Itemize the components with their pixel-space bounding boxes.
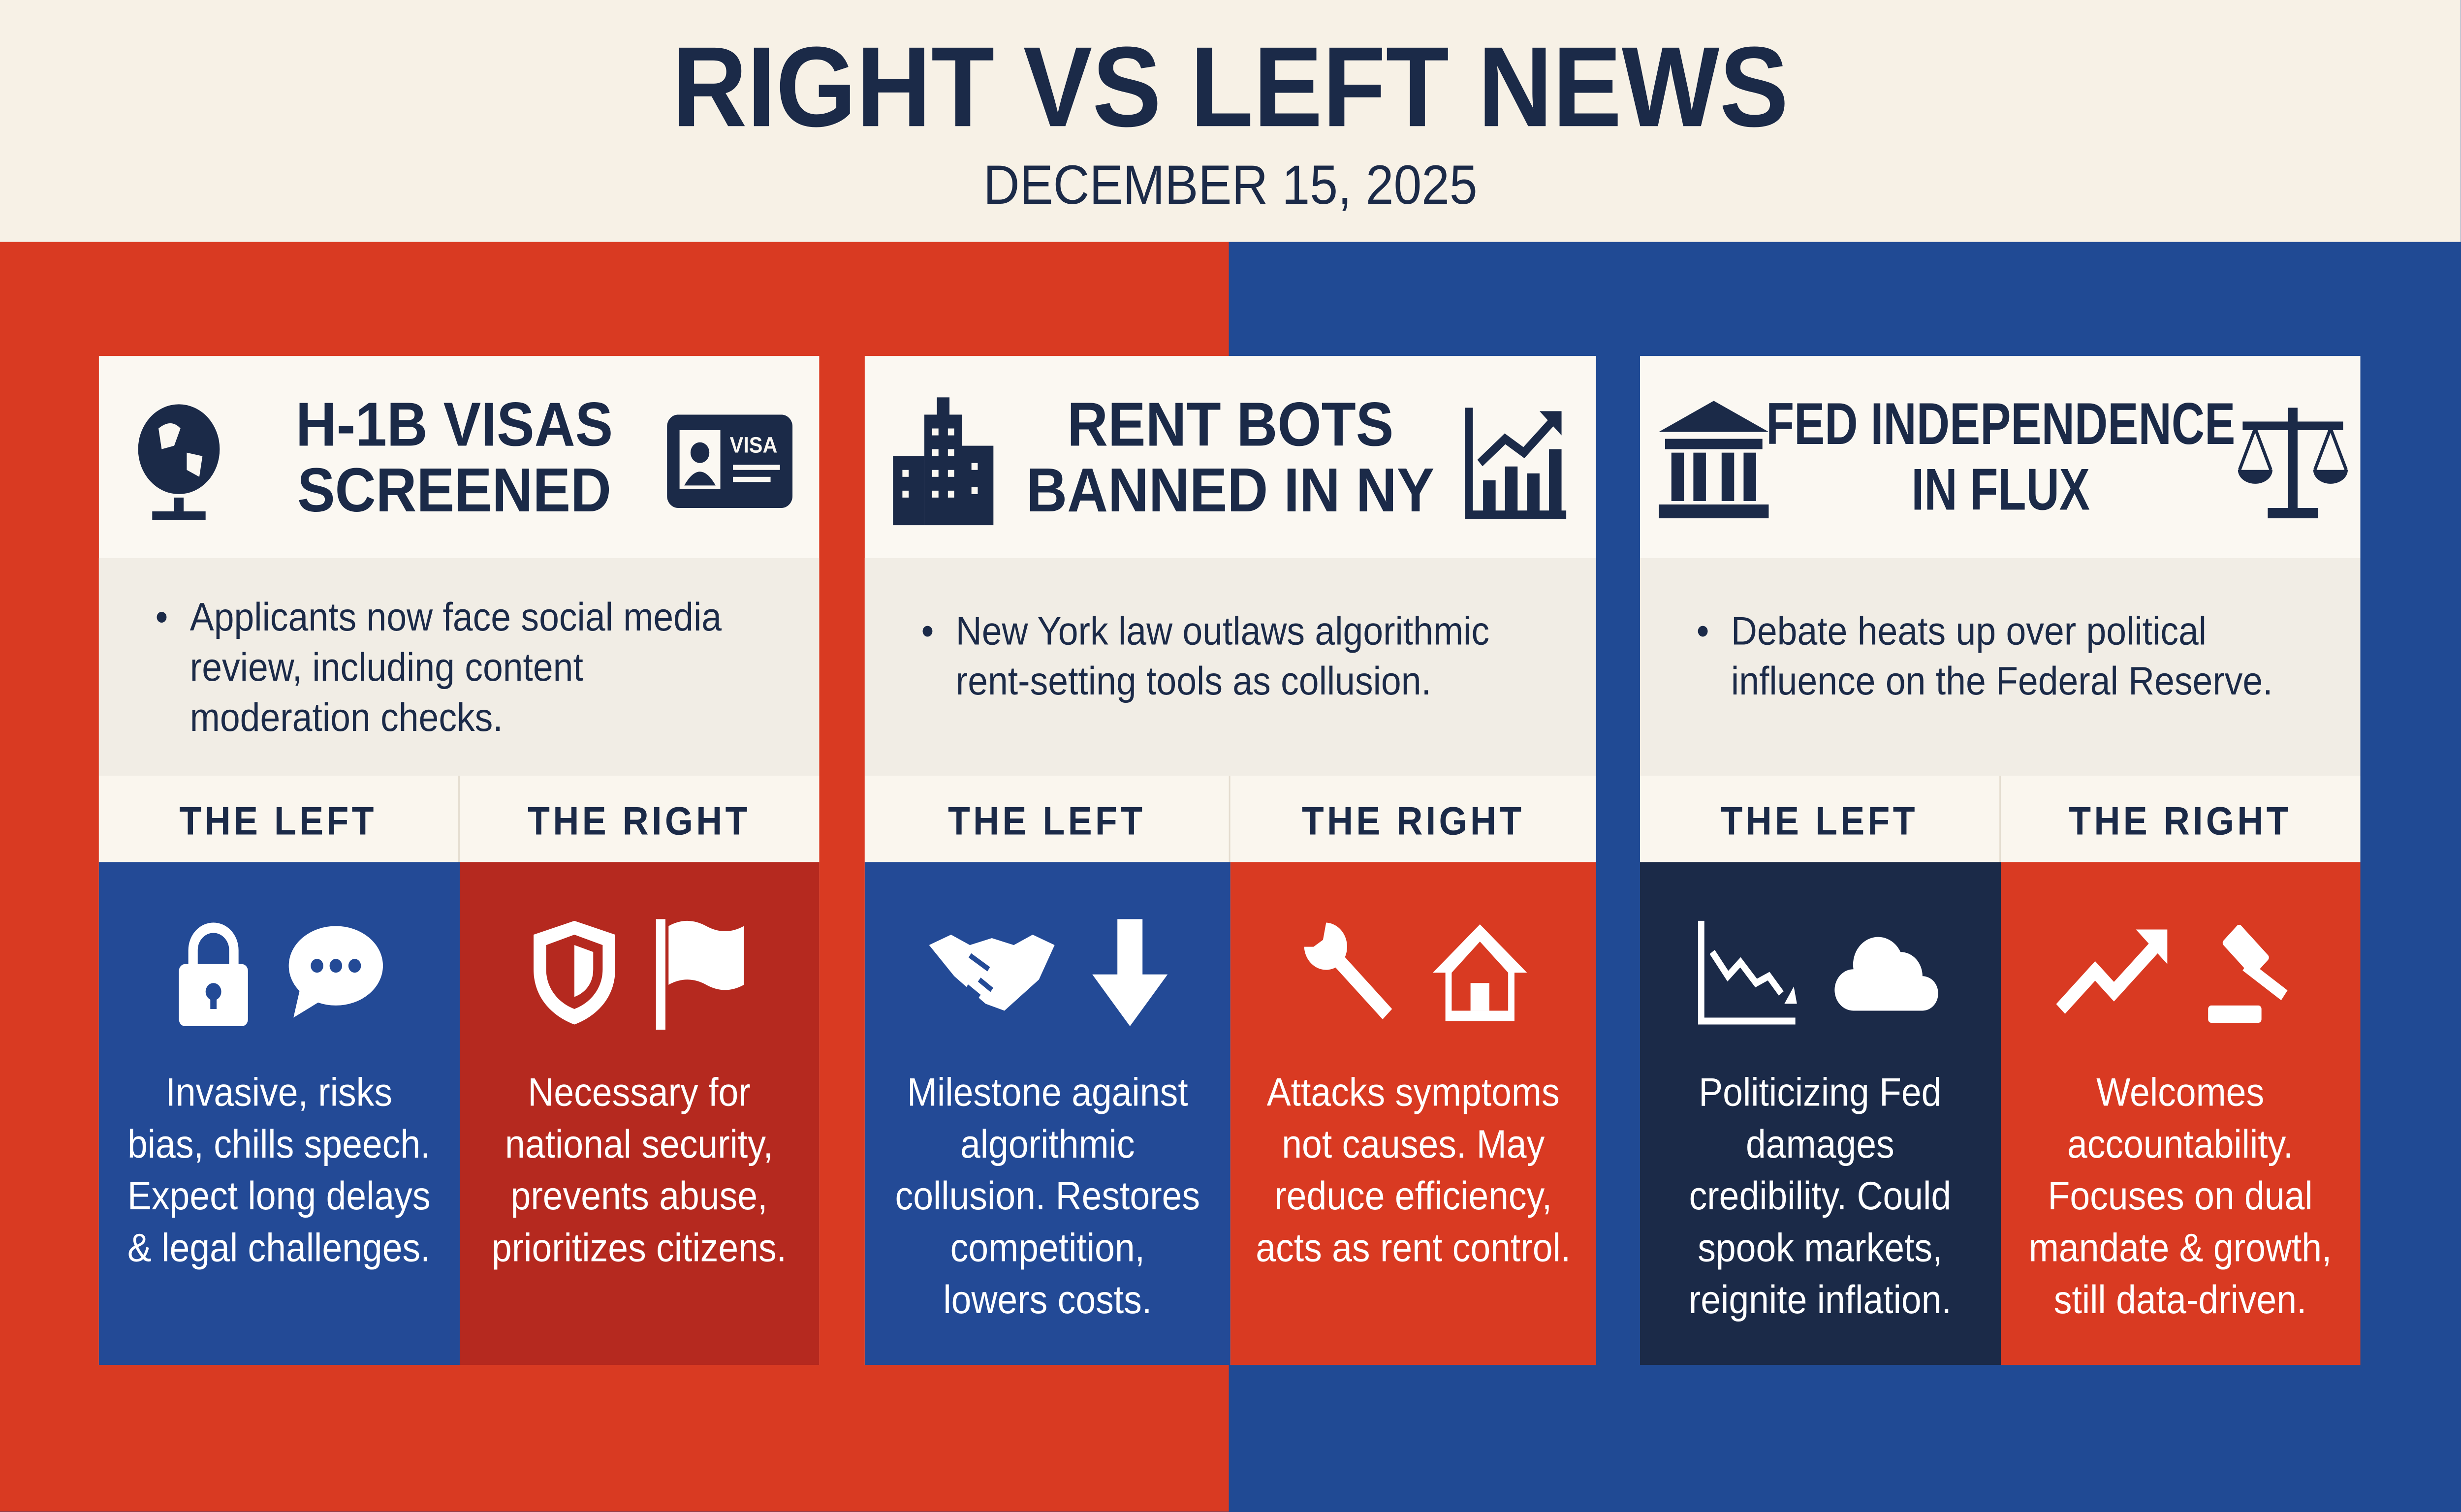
left view	[1640, 862, 2000, 1365]
right view	[459, 862, 819, 1365]
label right	[459, 776, 819, 862]
summary	[1640, 558, 2361, 776]
red background half	[0, 242, 1229, 1512]
left view: lowers costs.	[943, 1277, 1152, 1322]
left view: reignite inflation.	[1689, 1277, 1952, 1322]
right view: Attacks symptoms	[1267, 1070, 1560, 1114]
card heading	[893, 388, 1566, 526]
card heading: BANNED IN NY	[1026, 453, 1434, 524]
right view: mandate & growth,	[2029, 1225, 2332, 1270]
left view: credibility. Could	[1689, 1173, 1951, 1218]
summary: review, including content	[190, 644, 583, 690]
summary: influence on the Federal Reserve.	[1731, 658, 2273, 703]
card heading	[138, 388, 792, 524]
right view: national security,	[505, 1121, 773, 1166]
card heading: SCREENED	[297, 453, 611, 524]
right view: reduce efficiency,	[1274, 1173, 1552, 1218]
label left	[99, 776, 459, 862]
right view: prioritizes citizens.	[492, 1225, 787, 1270]
right view: accountability.	[2067, 1121, 2293, 1166]
right view: not causes. May	[1282, 1121, 1545, 1166]
card heading: FED INDEPENDENCE	[1766, 391, 2235, 457]
right view: Focuses on dual	[2048, 1173, 2313, 1218]
label right	[2000, 776, 2361, 862]
right view	[1230, 862, 1596, 1365]
label left: THE LEFT	[179, 798, 377, 843]
summary: rent-setting tools as collusion.	[956, 658, 1431, 703]
card heading: VISA	[730, 433, 777, 458]
card heading: IN FLUX	[1911, 457, 2089, 523]
summary: Debate heats up over political	[1731, 608, 2207, 653]
label right: THE RIGHT	[528, 798, 751, 843]
label right	[1230, 776, 1596, 862]
right view: still data-driven.	[2054, 1277, 2306, 1322]
card heading: RENT BOTS	[1067, 388, 1393, 459]
left view: competition,	[950, 1225, 1145, 1270]
label left: THE LEFT	[948, 798, 1145, 843]
summary: Applicants now face social media	[190, 595, 722, 639]
date: DECEMBER 15, 2025	[983, 154, 1478, 216]
left view: & legal challenges.	[127, 1225, 431, 1270]
right view: acts as rent control.	[1256, 1225, 1571, 1270]
right view: Welcomes	[2096, 1070, 2264, 1114]
label left: THE LEFT	[1721, 798, 1918, 843]
header band	[0, 0, 2461, 242]
card heading: H-1B VISAS	[296, 388, 613, 459]
left view: collusion. Restores	[895, 1173, 1200, 1218]
right view	[2000, 862, 2361, 1365]
left view: spook markets,	[1698, 1225, 1942, 1270]
left view: Milestone against	[907, 1070, 1188, 1114]
left view: Invasive, risks	[165, 1070, 392, 1114]
label right: THE RIGHT	[1302, 798, 1525, 843]
summary: New York law outlaws algorithmic	[956, 608, 1489, 653]
label right: THE RIGHT	[2069, 798, 2292, 843]
left view: algorithmic	[960, 1121, 1135, 1166]
right view: prevents abuse,	[511, 1173, 767, 1218]
left view	[99, 862, 459, 1365]
summary	[865, 558, 1596, 776]
left view: Politicizing Fed	[1699, 1070, 1941, 1114]
card heading	[1659, 391, 2348, 523]
left view: Expect long delays	[127, 1173, 431, 1218]
label left	[1640, 776, 2000, 862]
panel: Fed independence	[1640, 356, 2361, 1365]
left view: bias, chills speech.	[127, 1121, 430, 1166]
panel: rent bots	[865, 356, 1596, 1365]
summary: moderation checks.	[190, 694, 503, 739]
panel: H-1B visas	[99, 356, 819, 1365]
right view: Necessary for	[528, 1070, 751, 1114]
left view: damages	[1746, 1121, 1894, 1166]
summary	[99, 558, 819, 776]
left view	[865, 862, 1230, 1365]
label left	[865, 776, 1230, 862]
title: RIGHT VS LEFT NEWS	[672, 23, 1789, 150]
